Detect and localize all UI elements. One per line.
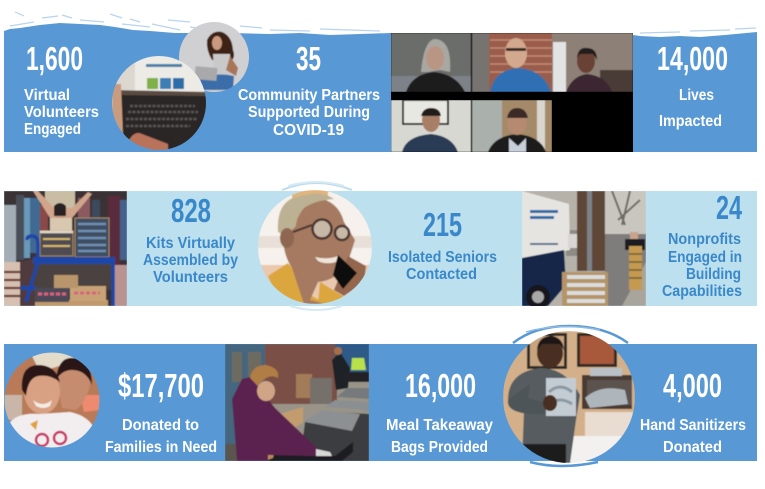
stat: $17,700 donated: $17,700 [118, 367, 204, 404]
stat: 24 nonprofits [662, 189, 742, 300]
stat: 828 kits assembled: 828 [171, 192, 211, 229]
photo: man holding bag of hand sanitizers [503, 331, 635, 464]
stat: 35 community partners [238, 40, 380, 139]
photo: woman with laptop [178, 21, 250, 93]
photo: delivery van and utility pole [522, 191, 646, 309]
stat: 4,000 hand sanitizers: Hand Sanitizers [640, 417, 746, 434]
stat: 16,000 meal bags: 16,000 [405, 367, 476, 404]
stat: 215 isolated seniors: Isolated Seniors [388, 249, 497, 266]
stat: 35 community partners: Supported During [248, 104, 370, 121]
stat: 1,600 virtual volunteers [24, 40, 99, 138]
stat: 16,000 meal bags: Meal Takeaway [386, 417, 493, 434]
stat: 16,000 meal bags: Bags Provided [391, 439, 488, 456]
stat: 24 nonprofits: Capabilities [662, 283, 742, 300]
panel: bottom blue band [4, 326, 757, 466]
stat: 828 kits assembled: Assembled by [143, 252, 238, 269]
stat: 828 kits assembled: Kits Virtually [146, 235, 235, 252]
stat: 215 isolated seniors: 215 [423, 206, 462, 243]
stat: $17,700 donated: Donated to [122, 417, 199, 434]
stat: 24 nonprofits: Nonprofits [668, 231, 741, 248]
photo: laptop showing virtual volunteering page [110, 55, 210, 152]
stat: 16,000 meal bags [386, 367, 493, 456]
stat: 14,000 lives impacted: Lives [679, 87, 714, 104]
stat: 35 community partners: Community Partners [238, 87, 380, 104]
stat: 1,600 virtual volunteers: Virtual [24, 87, 70, 104]
stat: 1,600 virtual volunteers: Engaged [24, 121, 81, 138]
stat: 1,600 virtual volunteers: 1,600 [26, 40, 83, 77]
photo: woman packing meal bags [225, 344, 369, 461]
stat: 35 community partners: 35 [296, 40, 321, 77]
stat: 14,000 lives impacted: Impacted [659, 113, 722, 130]
panel: middle light blue band [4, 182, 757, 310]
stat: 4,000 hand sanitizers: Donated [663, 439, 722, 456]
stat: 24 nonprofits: Building [686, 266, 741, 283]
stat: 4,000 hand sanitizers [640, 367, 746, 456]
stat: $17,700 donated: Families in Need [105, 439, 217, 456]
stat: 215 isolated seniors: Contacted [406, 266, 477, 283]
stat: 14,000 lives impacted [657, 40, 728, 130]
stat: 14,000 lives impacted: 14,000 [657, 40, 728, 77]
photo: volunteer with kits on blue cart [4, 191, 127, 306]
stat: 828 kits assembled: Volunteers [153, 269, 228, 286]
panel: top blue band [4, 12, 757, 153]
photo: mother and daughter [4, 352, 100, 450]
stat: 215 isolated seniors [388, 206, 497, 283]
stat: 24 nonprofits: 24 [716, 189, 742, 226]
stat: $17,700 donated [105, 367, 217, 456]
stat: 828 kits assembled [143, 192, 238, 286]
stat: 24 nonprofits: Engaged in [668, 249, 742, 266]
photo: video call grid [390, 32, 634, 153]
stat: 4,000 hand sanitizers: 4,000 [663, 367, 722, 404]
icon: brush ring around man photo [513, 326, 628, 466]
photo: senior woman on phone [258, 190, 372, 304]
icon: brush ring around senior photo [282, 182, 352, 310]
stat: 1,600 virtual volunteers: Volunteers [24, 104, 99, 121]
stat: 35 community partners: COVID-19 [273, 122, 344, 139]
